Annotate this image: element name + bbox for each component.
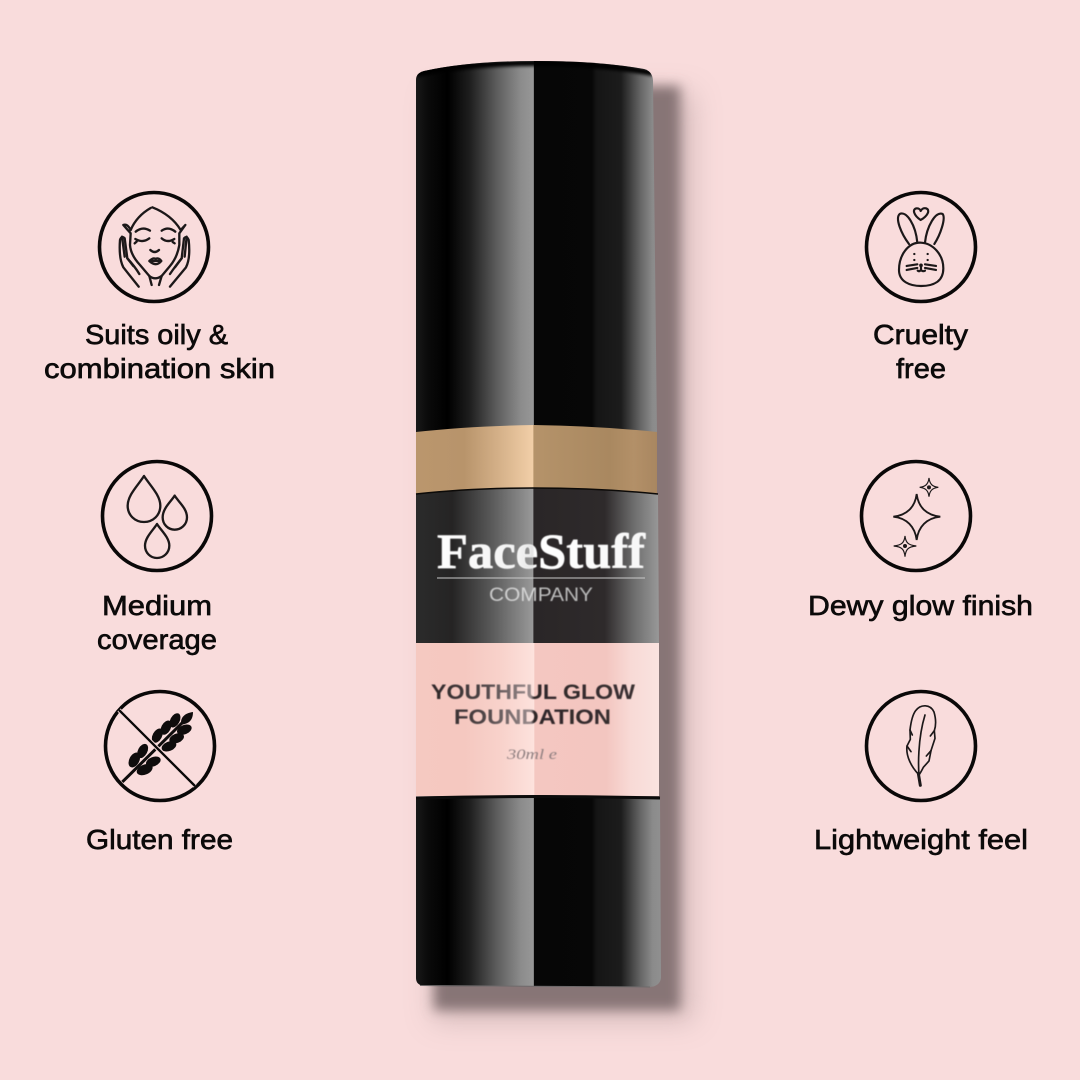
label: combination skin: [44, 353, 275, 384]
label: free: [896, 353, 946, 384]
feature: cruelty free: [866, 192, 976, 384]
bottle foundation colour band: [416, 425, 657, 494]
label: Medium: [102, 590, 212, 621]
bottle upper cap: [416, 60, 658, 436]
icon: droplets: [102, 462, 212, 570]
bottle base: [416, 795, 661, 987]
label: [97, 590, 217, 655]
label: [44, 319, 275, 384]
bottle dark label band: [416, 488, 659, 643]
product bottle: [416, 60, 694, 1022]
label: [873, 319, 968, 384]
icon: sparkles: [862, 462, 970, 570]
icon: rabbit with heart: [866, 192, 976, 302]
feature: dewy glow finish: [808, 462, 1033, 621]
bottle pink label band: [416, 643, 659, 796]
icon: feather: [866, 692, 976, 800]
icon: crossed wheat: [106, 692, 214, 800]
feature: lightweight feel: [814, 692, 1028, 855]
brand rule: [437, 578, 645, 579]
feature: suits oily and combination skin: [44, 192, 275, 384]
product name: [431, 681, 635, 729]
label: Gluten free: [86, 824, 233, 855]
brand subline: COMPANY: [489, 585, 593, 606]
icon: face with hands: [100, 192, 208, 302]
product name: FOUNDATION: [454, 706, 611, 729]
label: Lightweight feel: [814, 824, 1028, 855]
product name: YOUTHFUL GLOW: [431, 681, 635, 704]
label: Cruelty: [873, 319, 968, 350]
volume: 30ml e: [506, 747, 557, 763]
label: Dewy glow finish: [808, 590, 1033, 621]
label: coverage: [97, 624, 217, 655]
feature: medium coverage: [97, 462, 217, 655]
brand name: FaceStuff: [437, 523, 646, 579]
label: Suits oily &: [85, 319, 228, 350]
feature: gluten free: [86, 692, 233, 855]
bottle shadow: [432, 86, 694, 1022]
